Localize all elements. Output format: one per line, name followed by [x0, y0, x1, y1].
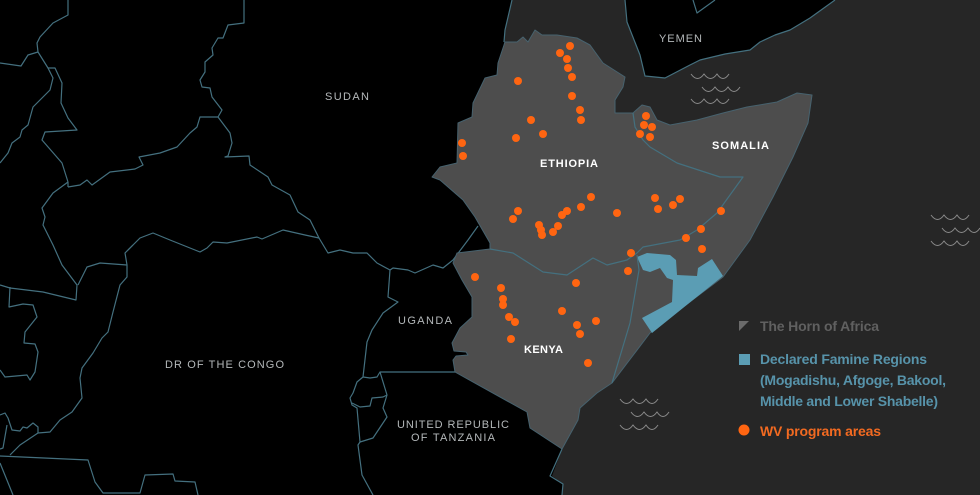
country labels: YEMEN — [659, 33, 702, 45]
legend text: famine regions: Middle and Lower Shabelle) — [760, 393, 938, 409]
internal borders — [490, 113, 743, 383]
panel: Horn of Africa landmass — [432, 30, 812, 449]
icon: Horn of Africa swatch — [739, 321, 749, 331]
country labels: UGANDA — [398, 315, 453, 327]
country labels: OF TANZANIA — [411, 432, 496, 444]
icon: waves Gulf of Aden — [691, 74, 740, 104]
WV program area dots — [458, 42, 725, 367]
country labels: DR OF THE CONGO — [165, 359, 284, 371]
country labels: SUDAN — [325, 91, 369, 103]
legend text: famine regions — [760, 351, 946, 409]
country labels: KENYA — [524, 344, 563, 356]
declared famine regions — [637, 253, 723, 333]
legend text: famine regions: Declared Famine Regions — [760, 351, 927, 367]
icon: waves south — [620, 399, 669, 430]
legend — [738, 318, 946, 439]
legend text: Horn of Africa: The Horn of Africa — [760, 318, 879, 334]
icon: waves east — [931, 215, 980, 246]
icon: famine swatch — [739, 354, 750, 365]
country labels: SOMALIA — [712, 140, 769, 152]
sea background — [490, 0, 980, 495]
country labels: UNITED REPUBLIC — [397, 419, 509, 431]
country labels — [165, 33, 769, 444]
country labels: ETHIOPIA — [540, 158, 598, 170]
legend text: WV program areas: WV program areas — [760, 423, 881, 439]
icon: WV dot — [738, 424, 750, 436]
legend text: famine regions: (Mogadishu, Afgoge, Bakool, — [760, 372, 946, 388]
